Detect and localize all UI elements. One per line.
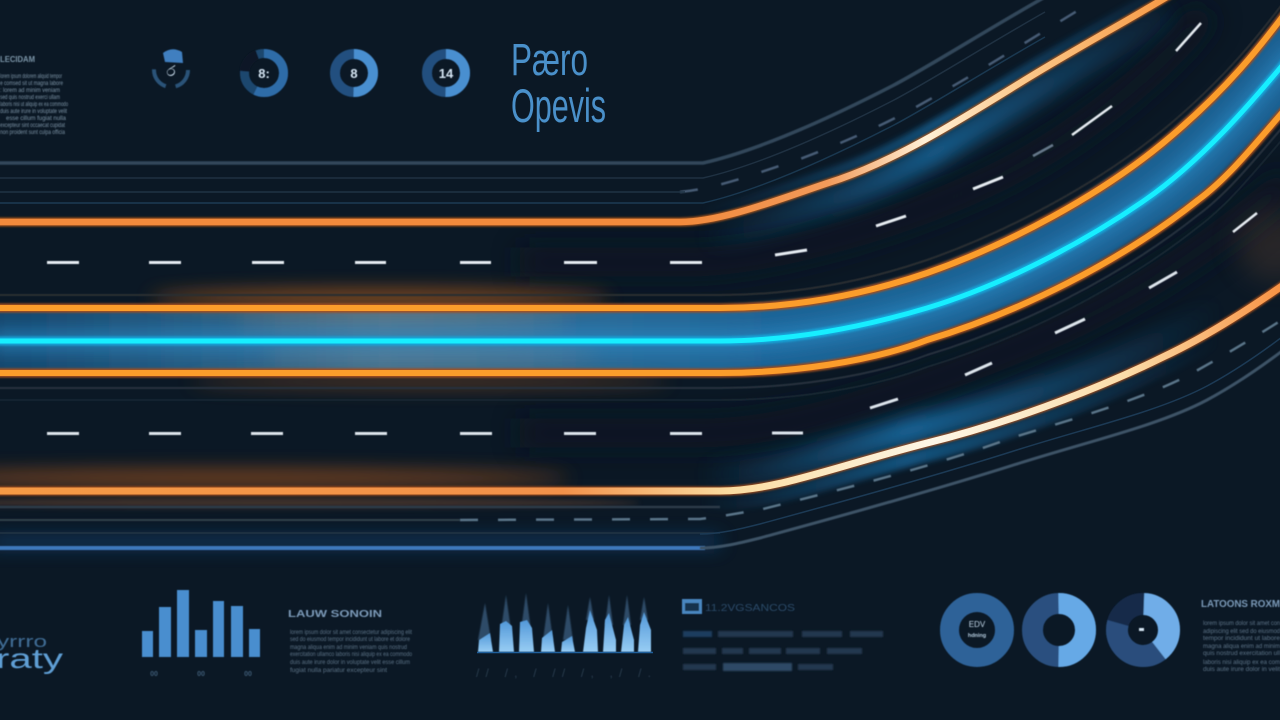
axis labels: 00 — [197, 671, 205, 678]
title: Pæro — [511, 34, 588, 85]
paragraph: non proident sunt culpa officia — [0, 130, 66, 136]
text block: donut description: magna aliqua enim ad minim — [1203, 644, 1280, 650]
icon: donut 3 — [335, 54, 373, 92]
cyan road line — [0, 50, 1280, 341]
lower road edge lines — [0, 318, 1280, 548]
text block: bar chart description: exercitation ullamco laboris nisi aliquip ex ea commodo — [290, 652, 413, 658]
text block: bar chart description: lorem ipsum dolor sit amet consectetur adipiscing elit — [290, 630, 412, 636]
bottom left title — [0, 632, 63, 674]
white lane dashes: lower lane — [47, 272, 1177, 434]
legend block — [682, 599, 883, 671]
text block: donut description: duis aute irure dolor in velit — [1203, 667, 1280, 673]
paragraph: laboris nisi ut aliquip ex ea commodo — [0, 102, 68, 108]
bar chart — [142, 590, 260, 678]
paragraph: esse cillum fugiat nulla — [6, 116, 67, 122]
icon: donut 4: 14 — [439, 66, 454, 81]
bars — [142, 590, 260, 657]
white lane dashes: upper lane — [47, 23, 1257, 262]
text block: bar chart description: magna aliqua enim ad minim veniam quis nostrud — [290, 645, 407, 651]
icon: legend box — [682, 599, 702, 614]
paragraph: lorem ipsum dolorem aliquid tempor — [0, 74, 62, 80]
orange road line: centre lower — [0, 98, 1280, 373]
icon: donut 4 — [427, 54, 465, 92]
text block: donut description: tempor incididunt ut labore — [1203, 636, 1280, 642]
dark lane shading — [520, 10, 1280, 433]
donut chart 3 — [1106, 593, 1180, 667]
orange road line: top — [0, 0, 1170, 222]
icon: donut 3: 8 — [350, 66, 358, 81]
icon: partial ring 1 — [154, 49, 188, 87]
axis labels: // /, / // /, ,/ /. — [476, 666, 651, 680]
icon: donut 2: 8: — [258, 66, 270, 81]
title: Opevis — [511, 79, 606, 132]
heading: LECIDAM — [0, 55, 35, 64]
upper road edge lines — [0, 0, 1095, 203]
donut chart 2 — [1032, 603, 1086, 657]
road background glows — [0, 0, 1280, 542]
text block: bar chart description: duis aute irure dolor in voluptate velit esse cillum — [290, 660, 410, 666]
text block: bar chart description: fugiat nulla pariatur excepteur sint — [290, 668, 387, 674]
faint lines around centre lanes — [0, 0, 1280, 400]
paragraph: : lorem ad minim veniam — [0, 88, 60, 94]
title — [511, 34, 606, 132]
axis labels: 00 — [244, 671, 252, 678]
glow beside bottom orange line — [0, 209, 1280, 542]
dark spikes — [478, 593, 648, 640]
text block: donut description — [1201, 598, 1280, 673]
baseline — [477, 652, 653, 654]
paragraph: sed quis nostrud exerci ullam — [0, 95, 60, 101]
paragraph — [0, 74, 68, 136]
icon: partial ring 1: ර — [166, 63, 176, 80]
paragraph: duis aute irure in voluptate velit — [0, 109, 67, 115]
donut chart 1: hdning — [968, 633, 986, 639]
icon: donut 2 — [243, 52, 285, 94]
legend rows — [683, 631, 883, 671]
top left text block — [0, 55, 68, 136]
paragraph: e comsed sit ut magna labore — [0, 81, 64, 87]
orange road line: centre upper — [0, 0, 1280, 308]
orange road line: bottom — [0, 277, 1280, 491]
paragraph: excepteur sint occaecat cupidat — [0, 123, 65, 129]
text block: bar chart description: sed do eiusmod tempor incididunt ut labore et dolore — [290, 637, 411, 643]
donut chart 1 — [950, 602, 1004, 658]
axis labels: 00 — [150, 671, 158, 678]
light bodies — [478, 610, 651, 652]
blue band between centre lanes — [0, 0, 1280, 388]
text block: donut description: quis nostrud exercitation ull — [1203, 651, 1280, 657]
axis labels — [150, 671, 252, 678]
text block: bar chart description: LAUW SONOIN — [288, 608, 382, 620]
text block: bar chart description — [288, 608, 413, 674]
spike area chart — [476, 593, 653, 680]
text block: donut description: laboris nisi aliquip ex ea com — [1203, 660, 1280, 666]
donut chart 1: EDV — [969, 620, 986, 629]
glow beside top orange line — [0, 0, 1170, 240]
legend heading: 11.2VGSANCOS — [705, 603, 795, 614]
